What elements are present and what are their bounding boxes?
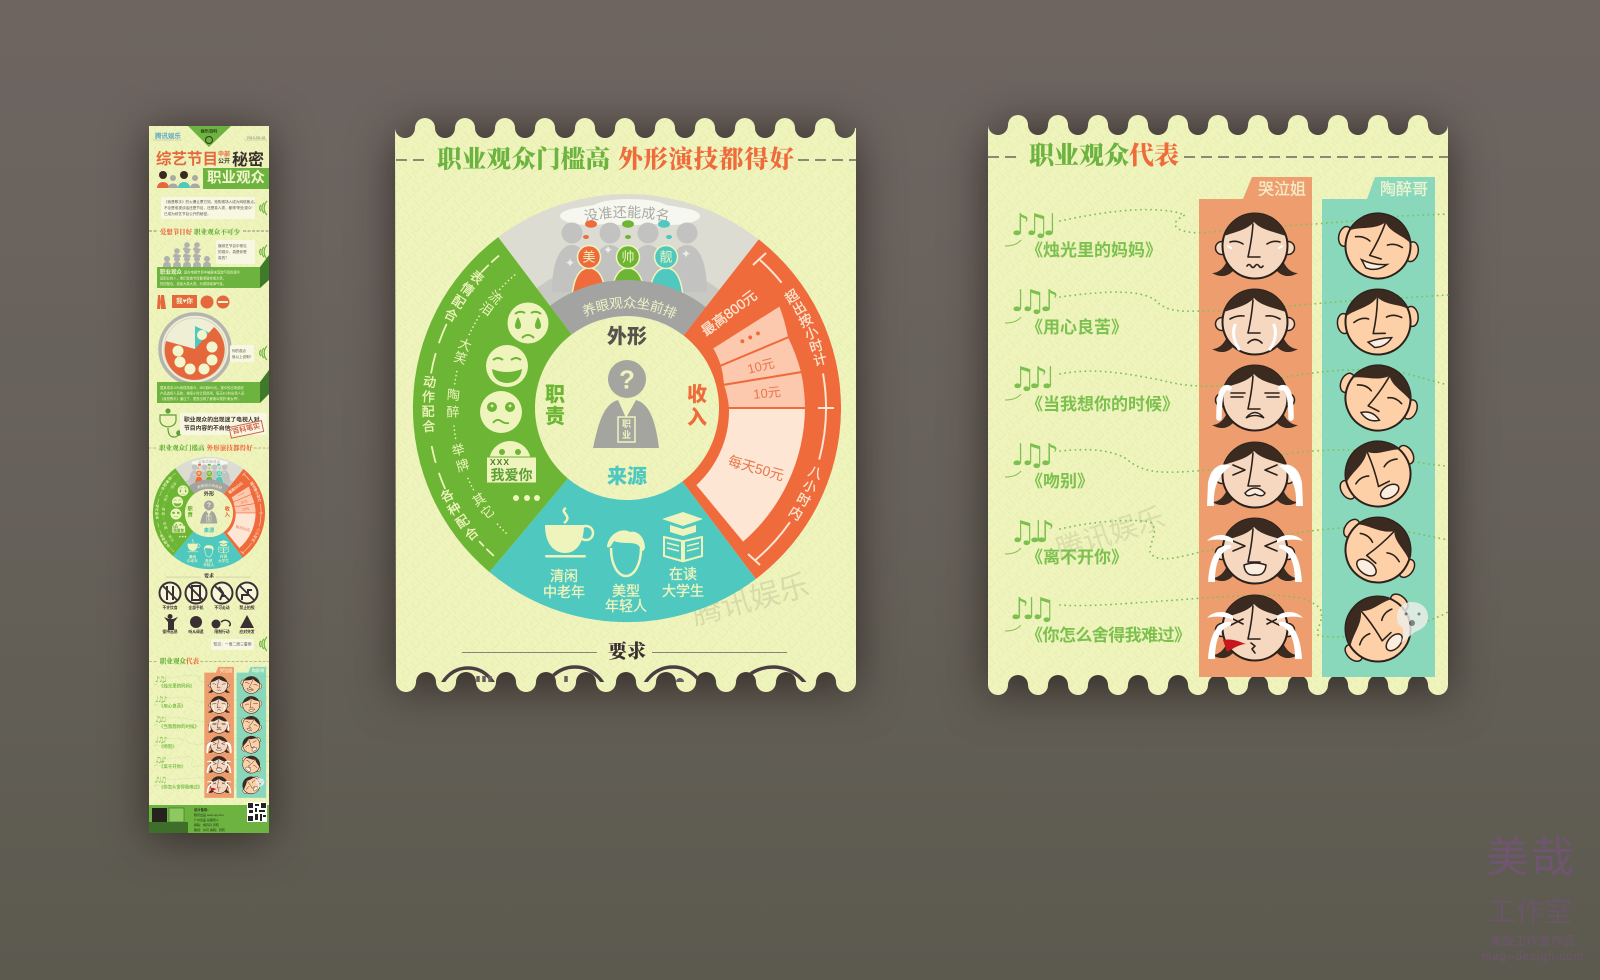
section title: 外形演技都得好 bbox=[618, 144, 794, 174]
person: beautiful orange: 美 bbox=[582, 250, 596, 264]
icon: question person with badge bbox=[593, 360, 659, 448]
thumbnail action captions: 听从调遣 bbox=[188, 629, 204, 634]
thumbnail ban captions: 全部手机 bbox=[188, 605, 204, 610]
face: crying sister 6 bbox=[1207, 595, 1303, 660]
thumbnail green info box bbox=[157, 255, 269, 288]
arc labels: inner actions bbox=[446, 288, 505, 522]
band: front row seats: 坐 bbox=[636, 296, 651, 313]
thumbnail ban captions: 不许饮食 bbox=[162, 605, 178, 610]
arc labels: inner actions: 它 bbox=[478, 502, 497, 522]
cloud caption: 没 bbox=[583, 206, 600, 224]
representatives section content bbox=[988, 142, 1448, 681]
arc label: beyond hourly: 小 bbox=[802, 324, 821, 343]
song 4 bbox=[1005, 438, 1094, 491]
face: crying sister 5 bbox=[1207, 518, 1303, 584]
sparkles: ✦ bbox=[603, 243, 613, 257]
thumbnail orange icons row bbox=[157, 295, 230, 309]
arc labels: inner actions: 泪 bbox=[477, 299, 496, 319]
panel: audience representatives bbox=[988, 115, 1448, 695]
column: intoxicated brother bbox=[1322, 177, 1435, 677]
cloud caption: 还 bbox=[613, 204, 627, 220]
thumbnail remark box: 知识：一周二周三看例 bbox=[214, 642, 252, 646]
threshold section content bbox=[346, 127, 908, 689]
arc label: beyond hourly: 超 bbox=[782, 286, 802, 307]
arc label: various cooperation: 配 bbox=[453, 512, 472, 531]
arc label: action cooperation bbox=[421, 374, 437, 434]
time ruler bbox=[346, 127, 908, 689]
thumbnail main title: 综艺节目 bbox=[156, 149, 218, 168]
song 3: ♫♪♩ bbox=[1009, 361, 1055, 396]
face: intoxicated brother 4 bbox=[1327, 425, 1429, 523]
thumbnail fact box with stamp bbox=[180, 413, 267, 438]
center labels bbox=[545, 325, 707, 488]
sector: source bbox=[489, 478, 756, 622]
thumbnail note box: 娱综艺节目中常见 bbox=[218, 243, 247, 248]
background audience silhouettes bbox=[552, 222, 707, 292]
song 5 bbox=[1005, 515, 1128, 567]
label: idle middle aged: 中老年 bbox=[543, 584, 585, 600]
thumbnail intro text box: 不论是电视谈话还是节目，还是真人秀，都得“职业观众” bbox=[164, 205, 253, 210]
sector: income bbox=[346, 127, 908, 689]
wheel chart bbox=[346, 127, 908, 689]
person: handsome green: 帅 bbox=[621, 250, 635, 264]
thumbnail clock pie chart bbox=[160, 314, 230, 384]
thumbnail main title: 公开 bbox=[218, 158, 230, 165]
person: pretty teal: 靓 bbox=[659, 250, 673, 264]
center labels: 外形 bbox=[607, 325, 647, 348]
watermark: 腾讯娱乐 bbox=[688, 569, 813, 632]
song 2: ♩♫♪ bbox=[1011, 284, 1059, 319]
thumbnail logo and date: 2013-05-15 bbox=[247, 136, 265, 140]
thumbnail intro text box: 《我是歌手》的火爆让票方知，抢购现场人成为网络焦点。 bbox=[164, 199, 257, 204]
arc label: within eight hours: 小 bbox=[801, 477, 819, 496]
label: current students bbox=[662, 566, 704, 599]
band: front row seats: 观 bbox=[609, 295, 624, 312]
icon: face with sign: 我爱你 bbox=[490, 467, 532, 483]
sparkles: ✦ bbox=[565, 256, 575, 270]
section title: 职业观众门槛高 bbox=[437, 144, 610, 174]
panel paper with scalloped edges bbox=[988, 115, 1448, 695]
song 6 bbox=[1005, 592, 1191, 645]
face: intoxicated brother 3 bbox=[1328, 352, 1428, 444]
thumbnail action captions bbox=[162, 629, 255, 634]
band: front row seats bbox=[550, 280, 706, 336]
thumbnail logo and date bbox=[153, 131, 267, 140]
arc labels: inner actions: 陶 bbox=[446, 387, 461, 403]
thumbnail copy of representatives section bbox=[149, 656, 270, 799]
cloud bbox=[560, 199, 700, 225]
thumbnail footer: 腾讯出品 www.qq.com bbox=[194, 812, 224, 817]
thumbnail intro text box bbox=[161, 197, 267, 219]
song 1: 《烛光里的妈妈》 bbox=[1026, 241, 1162, 260]
arc label: expression cooperation: 配 bbox=[449, 292, 468, 312]
thumbnail action captions: 保持高昂 bbox=[162, 629, 178, 634]
thumbnail title box bbox=[203, 168, 269, 189]
label: current students: 在读 bbox=[669, 566, 697, 582]
thumbnail intro text box: 已成为综艺节目公开的秘密。 bbox=[164, 211, 211, 216]
center labels: 收 bbox=[687, 383, 707, 406]
thumbnail remark box bbox=[211, 637, 267, 651]
arc label: within eight hours bbox=[786, 463, 824, 523]
icon: drunk face: ✦ bbox=[507, 402, 513, 410]
song 2 bbox=[1005, 284, 1128, 337]
label: idle middle aged: 清闲 bbox=[550, 568, 578, 584]
face: intoxicated brother 6 bbox=[1327, 577, 1429, 681]
income labels: 最高800元 bbox=[698, 287, 760, 339]
center labels: 入 bbox=[687, 406, 707, 429]
arc label: action cooperation: 动 bbox=[422, 374, 437, 390]
label: good looking youth bbox=[605, 583, 647, 614]
face: intoxicated brother 1 bbox=[1331, 205, 1425, 287]
arc label: beyond hourly bbox=[782, 286, 828, 369]
arc labels: inner actions: 举 bbox=[450, 441, 466, 459]
arc labels: inner actions: 流 bbox=[485, 288, 505, 307]
thumbnail clock note: 你的观点 bbox=[232, 348, 246, 353]
thumbnail ban captions: 不可走动 bbox=[214, 605, 230, 610]
arc label: expression cooperation: 合 bbox=[442, 306, 460, 325]
thumbnail footer: 撰稿：杨丹丹 周晓 bbox=[194, 822, 219, 827]
sector: duties bbox=[346, 127, 908, 689]
thumbnail green info box: 是在电视节目中被雇来营造气氛的观众 bbox=[184, 270, 241, 274]
arc label: various cooperation bbox=[438, 486, 481, 544]
song 6: 《你怎么舍得我难过》 bbox=[1026, 625, 1191, 645]
cloud caption: 准 bbox=[598, 204, 613, 222]
logo caption: 美哉工作室作品 bbox=[1490, 933, 1575, 948]
sector: income: 10元 bbox=[746, 355, 776, 377]
thumbnail logo and date: 腾讯娱乐 bbox=[155, 131, 182, 140]
face: crying sister 1 bbox=[1212, 213, 1298, 278]
logo studio text: 工作室 bbox=[1488, 890, 1572, 930]
person: handsome green bbox=[611, 220, 645, 296]
studio logo watermark bbox=[1482, 823, 1583, 963]
arc label: beyond hourly: 出 bbox=[790, 299, 809, 318]
thumbnail ban captions bbox=[162, 605, 255, 610]
band: front row seats: 眼 bbox=[594, 297, 611, 315]
arc label: expression cooperation: 情 bbox=[458, 279, 477, 299]
bottom cut-off icon rings bbox=[441, 665, 806, 682]
icon: question person with badge: 职 bbox=[622, 419, 631, 429]
cloud caption: 名 bbox=[654, 206, 671, 224]
arc labels: inner actions: 牌 bbox=[454, 456, 471, 475]
section title: 代表 bbox=[1129, 142, 1179, 170]
icon: question person with badge: 业 bbox=[622, 429, 631, 440]
thumbnail footer: 广州出品 总策划人 bbox=[194, 817, 219, 822]
center labels: 来源 bbox=[607, 465, 647, 488]
thumbnail fact box with stamp: 节目内容的不自信。 bbox=[184, 424, 236, 432]
arc label: action cooperation: 作 bbox=[421, 389, 435, 405]
icon: laughing face bbox=[486, 345, 528, 387]
cloud caption: 成 bbox=[641, 204, 656, 222]
panel paper with scalloped edges bbox=[395, 118, 856, 692]
label: idle middle aged bbox=[543, 568, 585, 600]
person: beautiful orange bbox=[572, 220, 606, 296]
section title: 职业观众 bbox=[1029, 142, 1129, 170]
center labels: 责 bbox=[545, 404, 565, 428]
arc label: beyond hourly: 时 bbox=[808, 337, 825, 356]
face: crying sister 2 bbox=[1212, 289, 1298, 354]
logo url: magi-design.com bbox=[1482, 951, 1583, 963]
thumbnail section heading one: 爱想节目好 bbox=[159, 227, 193, 236]
arc label: within eight hours: 时 bbox=[794, 490, 813, 510]
band: front row seats: 排 bbox=[660, 302, 679, 322]
icon: drunk face: ✦ bbox=[489, 402, 495, 410]
section title bbox=[396, 144, 856, 174]
section title bbox=[988, 142, 1448, 170]
arc label: various cooperation: 合 bbox=[462, 524, 481, 544]
thumbnail note box bbox=[216, 240, 267, 264]
thumbnail clock note: 就以上说明? bbox=[232, 354, 251, 359]
dotted song lines bbox=[1060, 210, 1448, 637]
thumbnail orange icons row: 我♥你 bbox=[176, 296, 193, 305]
icon: drunk face bbox=[480, 391, 522, 433]
sector: income: 10元 bbox=[753, 384, 781, 402]
song 5: ♫♩♪ bbox=[1009, 515, 1055, 550]
face: crying sister 4 bbox=[1207, 442, 1303, 508]
thumbnail action icons row bbox=[164, 614, 254, 630]
thumbnail second green box: 产品选择人员的，按每小时计算费用，每天8小时出场人员 bbox=[160, 390, 245, 396]
thumbnail ban icons row bbox=[160, 582, 258, 604]
sector: income: 每天50元 bbox=[726, 452, 786, 484]
watermark: 腾讯娱乐 bbox=[1052, 502, 1168, 566]
column: crying sister: 哭泣姐 bbox=[1258, 180, 1306, 198]
song 4: ♩♫♪ bbox=[1011, 438, 1059, 473]
thumbnail second green box bbox=[157, 370, 269, 403]
arc labels: inner actions: 笑 bbox=[452, 349, 469, 367]
thumbnail second green box: 《我是歌手》通过了，更是出现了雇佣众类的“美女哥”。 bbox=[160, 396, 241, 401]
thumbnail ban captions: 禁止拍照 bbox=[239, 605, 255, 610]
panel: overview long infographic thumbnail bbox=[135, 126, 283, 833]
thumbnail crowd icons bbox=[163, 242, 211, 267]
logo mark: 美哉 bbox=[1486, 823, 1574, 885]
thumbnail note box: 真的？ bbox=[218, 255, 229, 260]
face: intoxicated brother 2 bbox=[1334, 285, 1422, 359]
cloud caption: 能 bbox=[627, 204, 641, 220]
column: intoxicated brother: 陶醉哥 bbox=[1380, 180, 1428, 198]
song 1 bbox=[1005, 208, 1162, 260]
thumbnail action captions: 限制行动 bbox=[214, 629, 230, 634]
thumbnail second green box: 据某成本10%用现场观众，500到800元。观众的出场费用 bbox=[160, 385, 244, 390]
arc label: various cooperation: 各 bbox=[438, 486, 456, 505]
cloud caption bbox=[583, 204, 671, 224]
song 3 bbox=[1005, 361, 1179, 414]
sector: appearance background bbox=[498, 194, 759, 336]
label: good looking youth: 美型 bbox=[612, 583, 640, 599]
arc label: within eight hours: 内 bbox=[786, 504, 805, 523]
arc label: various cooperation: 种 bbox=[445, 499, 464, 519]
song 6: ♪♩♫ bbox=[1010, 592, 1056, 627]
face: crying sister 3 bbox=[1212, 365, 1298, 430]
thumbnail fact box with stamp: 职业观众的出现迷了电视人对 bbox=[184, 416, 260, 424]
sparkles: ✦ bbox=[681, 247, 691, 261]
income cells bbox=[695, 305, 806, 543]
arc label: beyond hourly: 计 bbox=[812, 351, 828, 369]
thumbnail section heading one bbox=[149, 227, 269, 236]
song 1: ♪♫♩ bbox=[1011, 208, 1057, 243]
icon: crying face bbox=[508, 302, 548, 344]
sparkles bbox=[565, 243, 691, 270]
face: intoxicated brother 5 bbox=[1326, 500, 1430, 600]
song 4: 《吻别》 bbox=[1026, 472, 1094, 491]
thumbnail footer: 策划：许可 编辑：周晓 bbox=[194, 827, 225, 832]
thumbnail green info box: 热情配合，或者大笑大哭，为现场增添气氛。 bbox=[160, 281, 226, 286]
thumbnail banner tag: 娱乐百科 bbox=[201, 128, 218, 134]
person: pretty teal bbox=[649, 220, 683, 296]
icon: tea cup bbox=[545, 508, 593, 558]
song 5: 《离不开你》 bbox=[1026, 547, 1128, 567]
icon: face with sign bbox=[486, 441, 536, 483]
arc label: action cooperation: 配 bbox=[421, 404, 435, 419]
band: front row seats: 众 bbox=[623, 295, 637, 311]
icon: book and cap bbox=[662, 512, 703, 561]
thumbnail footer: 设计备用： bbox=[194, 807, 210, 812]
thumbnail section heading one: 职业观众不可少 bbox=[194, 227, 242, 236]
center labels: 职 bbox=[545, 384, 565, 406]
dashed outer and dotted inner arcs bbox=[346, 127, 908, 689]
band: front row seats: 养 bbox=[580, 301, 598, 319]
song 3: 《当我想你的时候》 bbox=[1026, 395, 1179, 414]
arc label: beyond hourly: 按 bbox=[797, 311, 815, 330]
requirements heading: 要求 bbox=[608, 640, 646, 662]
arc label: expression cooperation: 表 bbox=[467, 268, 487, 287]
thumbnail green info box: 是职业的人，他们会按节目要求鼓掌或大笑， bbox=[160, 276, 226, 280]
arc label: expression cooperation bbox=[442, 268, 487, 325]
thumbnail banner tag bbox=[188, 126, 231, 147]
panel: threshold for professional audience bbox=[372, 109, 878, 710]
arc label: within eight hours: 八 bbox=[806, 463, 824, 482]
arc label: action cooperation: 合 bbox=[422, 418, 436, 434]
arc labels: inner actions: 其 bbox=[470, 490, 489, 509]
thumbnail clock note bbox=[230, 345, 267, 362]
thumbnail people icons bbox=[157, 171, 200, 188]
column: crying sister bbox=[1199, 177, 1312, 677]
icon: ghost leaving body bbox=[1397, 602, 1428, 643]
thumbnail main title bbox=[156, 149, 264, 169]
more dots bbox=[513, 495, 540, 501]
thumbnail copy of threshold section bbox=[135, 439, 283, 587]
thumbnail main title: 秘密 bbox=[232, 150, 264, 169]
thumbnail main title: 中部 bbox=[218, 150, 230, 158]
thumbnail footer bbox=[149, 802, 269, 833]
thumbnail note box: 的观众，真是你是 bbox=[218, 249, 247, 254]
thumbnail fact box with stamp: 百科笔实 bbox=[232, 421, 261, 436]
arc labels: inner actions: 大 bbox=[456, 335, 474, 354]
icon: question person with badge: ? bbox=[619, 364, 635, 394]
arc labels: inner actions: 醉 bbox=[446, 404, 460, 420]
thumbnail title box: 职业观众 bbox=[207, 170, 265, 186]
thumbnail green info box: 职业观众 bbox=[160, 268, 183, 276]
band: front row seats: 前 bbox=[648, 297, 666, 316]
thumbnail page bbox=[149, 126, 269, 833]
icon: face with sign: XXX bbox=[490, 457, 510, 467]
sector: income: • • • bbox=[736, 325, 764, 349]
song 2: 《用心良苦》 bbox=[1026, 317, 1128, 337]
thumbnail action captions: 应对突发 bbox=[239, 629, 255, 634]
label: current students: 大学生 bbox=[662, 583, 704, 599]
label: good looking youth: 年轻人 bbox=[605, 598, 647, 614]
thumbnail stethoscope icon bbox=[160, 409, 181, 437]
icon: young man head bbox=[607, 530, 645, 576]
